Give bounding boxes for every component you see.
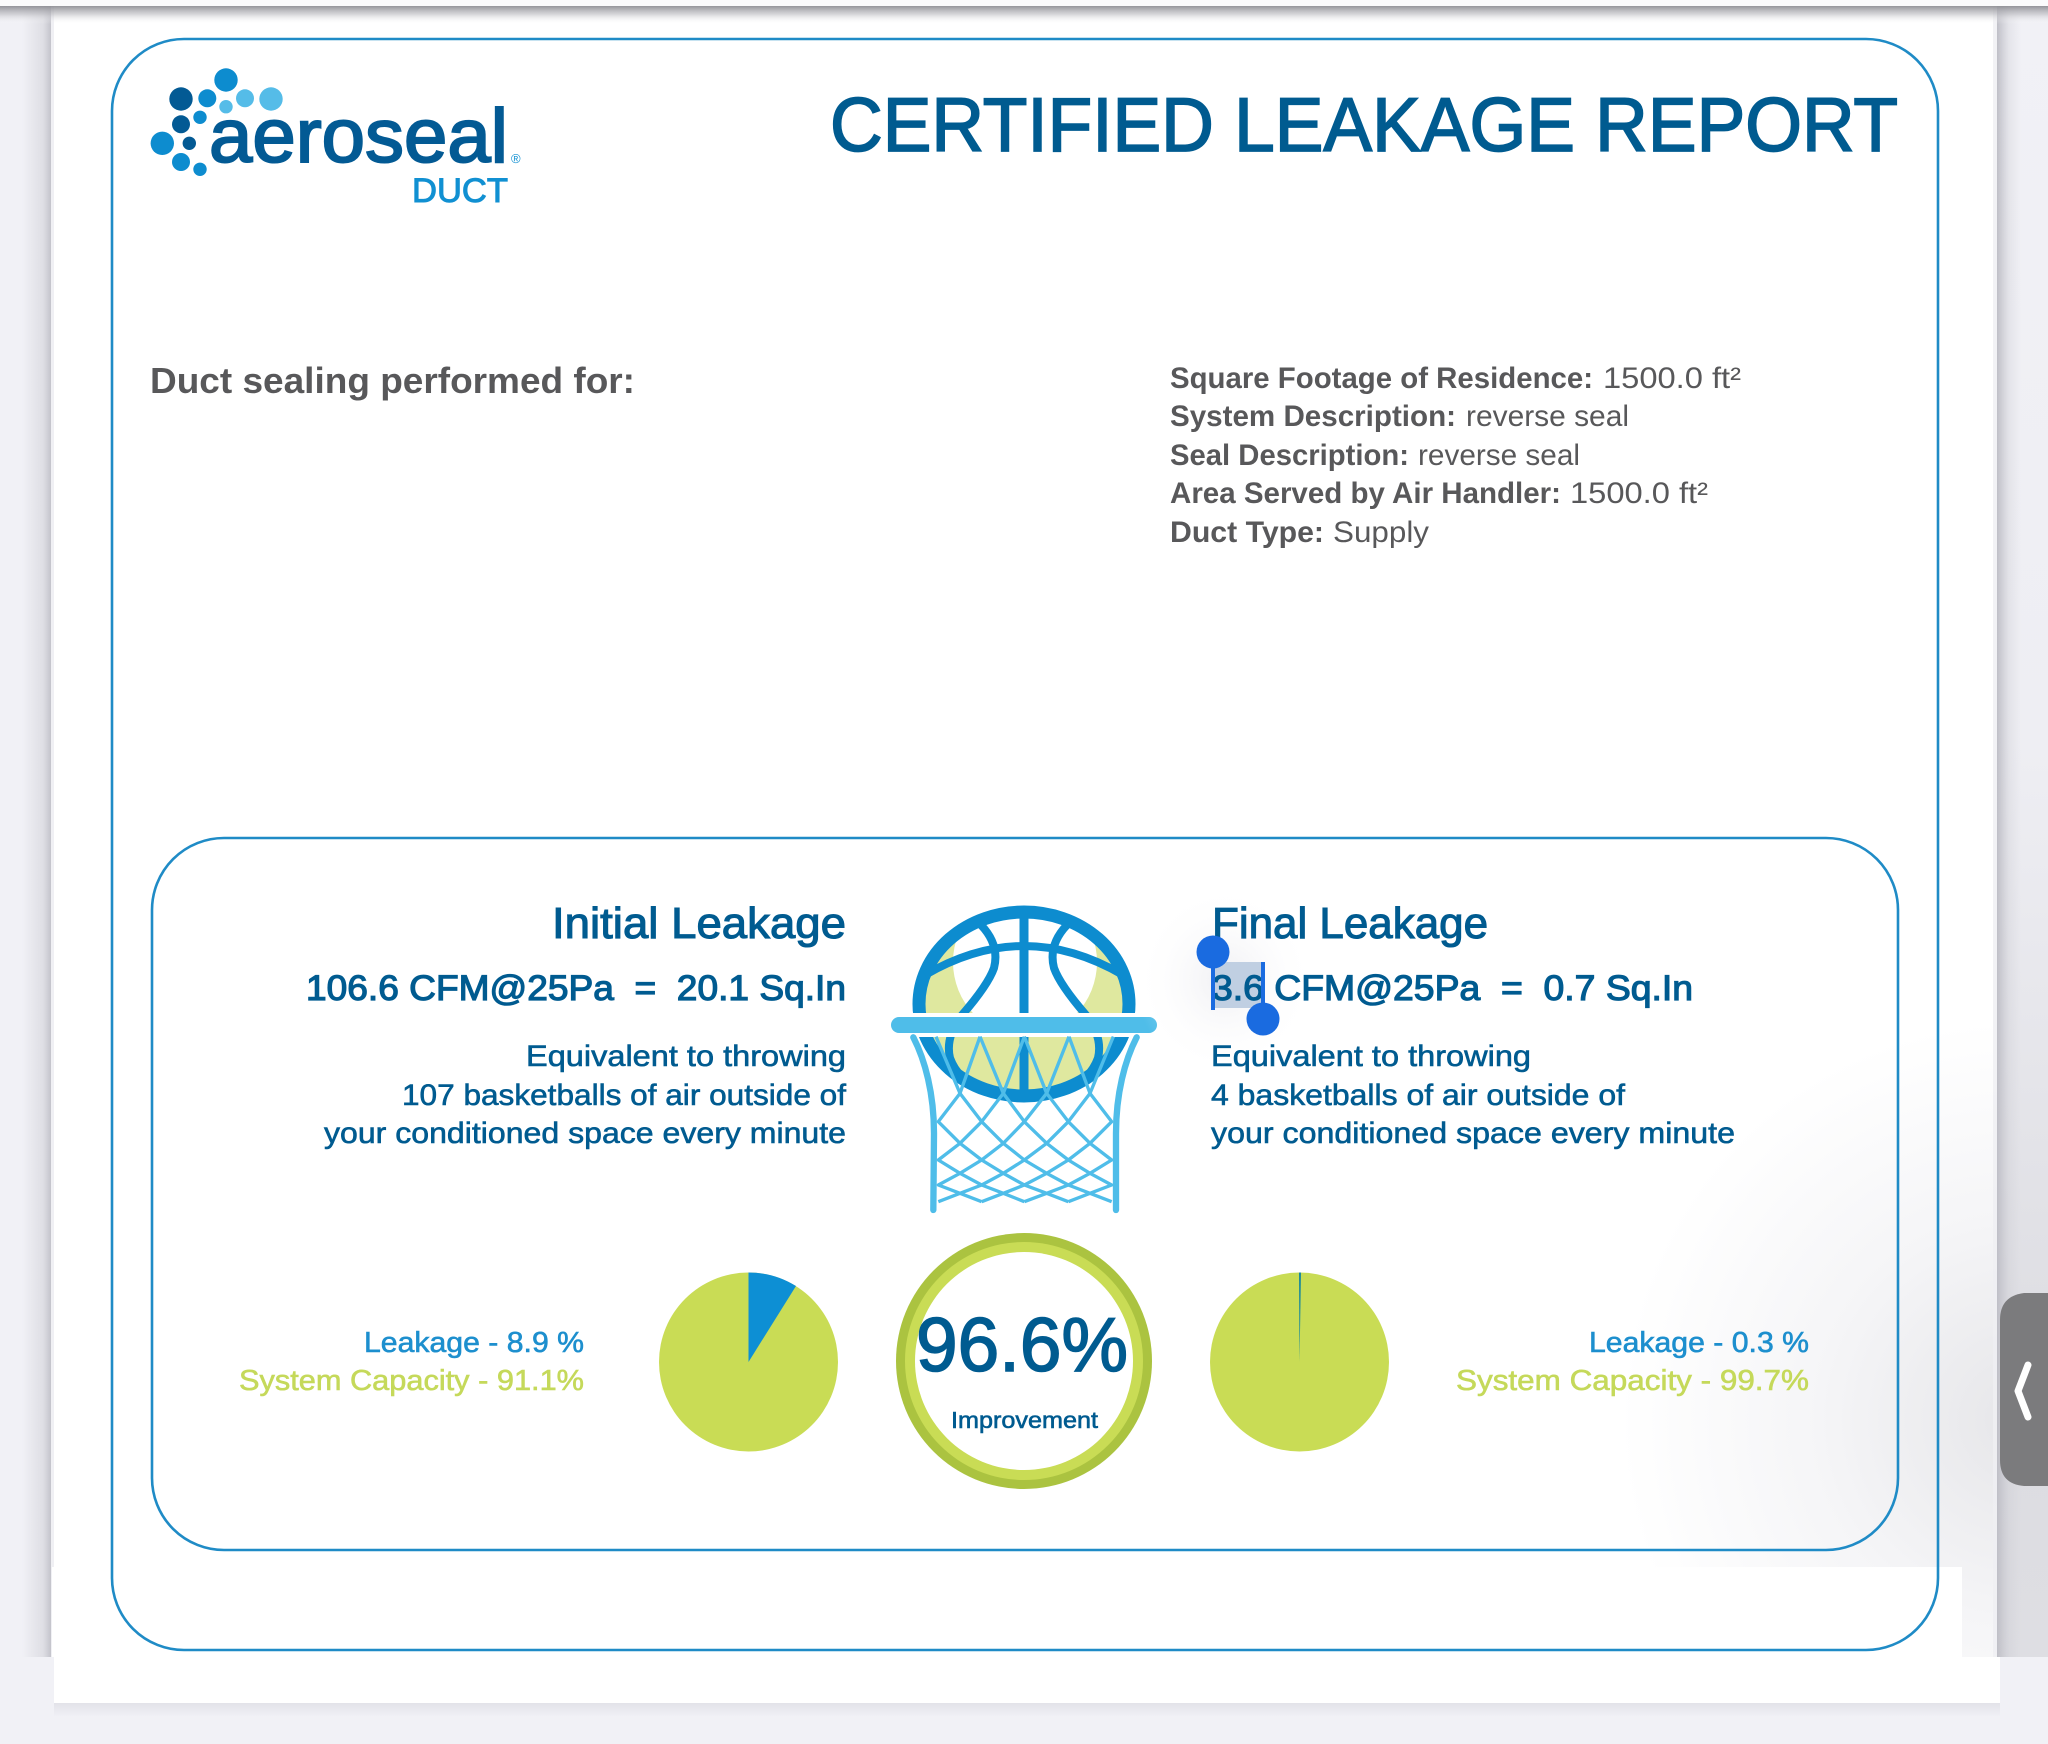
selection handles — [1196, 936, 1280, 1036]
logo: aeroseal duct: aeroseal — [209, 94, 508, 179]
system details list: reverse seal — [1466, 400, 1629, 433]
selection shadow — [1135, 885, 1315, 1075]
system details list: System Description: — [1170, 400, 1456, 433]
text block: final leakage: Equivalent to throwing — [1211, 1040, 1531, 1073]
text block: initial leakage: Initial Leakage — [552, 899, 846, 948]
pie chart: final leakage — [1210, 1272, 1389, 1452]
system details list: Duct Type: — [1170, 516, 1324, 549]
legend: final leakage — [1456, 1327, 1809, 1397]
system details list: reverse seal — [1418, 439, 1580, 472]
logo: aeroseal duct: DUCT — [412, 172, 508, 210]
heading: duct sealing performed for: Duct sealing performed for: — [150, 360, 635, 401]
panel: leakage results — [152, 838, 1898, 1550]
legend: initial leakage — [239, 1327, 584, 1397]
text block: initial leakage: your conditioned space every minute — [324, 1117, 846, 1150]
text block: initial leakage — [306, 899, 847, 1150]
text block: initial leakage: 107 basketballs of air outside of — [402, 1079, 847, 1112]
text block: final leakage: 4 basketballs of air outside of — [1211, 1079, 1626, 1112]
text block: final leakage: your conditioned space every minute — [1211, 1117, 1735, 1150]
legend: initial leakage: System Capacity - 91.1% — [239, 1365, 584, 1397]
improvement badge — [896, 1233, 1152, 1489]
text block: final leakage: Final Leakage — [1212, 899, 1488, 948]
system details list: Square Footage of Residence: — [1170, 362, 1593, 395]
logo: aeroseal duct: ® — [511, 151, 521, 166]
text block: initial leakage: 106.6 CFM@25Pa = 20.1 Sq.In — [306, 969, 846, 1008]
legend: final leakage: System Capacity - 99.7% — [1456, 1365, 1809, 1397]
icon: basketball and hoop — [891, 906, 1157, 1214]
title: CERTIFIED LEAKAGE REPORT — [830, 83, 1898, 168]
pie chart: initial leakage — [659, 1272, 838, 1452]
text selection highlight — [1212, 962, 1263, 1008]
logo: aeroseal duct — [151, 68, 521, 210]
system details list: Supply — [1333, 516, 1429, 549]
legend: initial leakage: Leakage - 8.9 % — [364, 1327, 584, 1359]
system details list: 1500.0 ft² — [1570, 477, 1708, 510]
improvement badge: Improvement — [951, 1407, 1099, 1433]
text block: final leakage: 3.6 CFM@25Pa = 0.7 Sq.In — [1212, 969, 1693, 1008]
improvement badge: 96.6% — [916, 1303, 1128, 1388]
system details list — [1170, 362, 1741, 549]
legend: final leakage: Leakage - 0.3 % — [1589, 1327, 1809, 1359]
text block: final leakage — [1211, 899, 1735, 1150]
system details list: Seal Description: — [1170, 439, 1409, 472]
text block: initial leakage: Equivalent to throwing — [526, 1040, 846, 1073]
system details list: 1500.0 ft² — [1603, 362, 1741, 395]
side tab with chevron — [2000, 1293, 2048, 1486]
top shadow — [0, 6, 2048, 24]
system details list: Area Served by Air Handler: — [1170, 477, 1561, 510]
